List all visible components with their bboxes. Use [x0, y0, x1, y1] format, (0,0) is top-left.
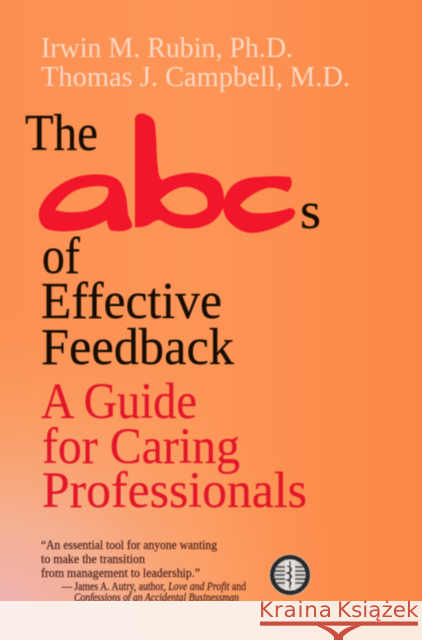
subtitle: Professionals — [42, 463, 307, 519]
endorsement quote: Confessions of an Accidental Businessman — [74, 592, 239, 604]
title: of — [42, 228, 81, 285]
authors: Irwin M. Rubin, Ph.D. — [41, 32, 293, 64]
bottom white band — [0, 601, 422, 640]
title: Feedback — [41, 319, 234, 376]
endorsement quote: “An essential tool for anyone wanting — [41, 537, 217, 552]
title: Effective — [41, 273, 222, 330]
endorsement quote: — James A. Autry, author, Love and Profit and — [61, 581, 246, 593]
icon: medical society seal — [270, 554, 310, 596]
endorsement quote — [41, 537, 246, 604]
authors: Thomas J. Campbell, M.D. — [41, 61, 350, 93]
endorsement quote: to make the transition — [41, 551, 145, 566]
title: s — [300, 183, 321, 240]
red hand-drawn abc lettering — [39, 113, 295, 233]
logo: Książek: Książek — [337, 598, 418, 623]
subtitle: for Caring — [42, 419, 240, 475]
subtitle — [41, 374, 307, 519]
authors — [41, 32, 350, 93]
logo: Kraina: Kraina — [259, 598, 333, 623]
endorsement quote: from management to leadership.” — [41, 565, 200, 580]
title: The — [25, 105, 98, 162]
title — [25, 105, 321, 376]
subtitle: A Guide — [41, 374, 197, 430]
logo: open book rule — [260, 622, 418, 640]
